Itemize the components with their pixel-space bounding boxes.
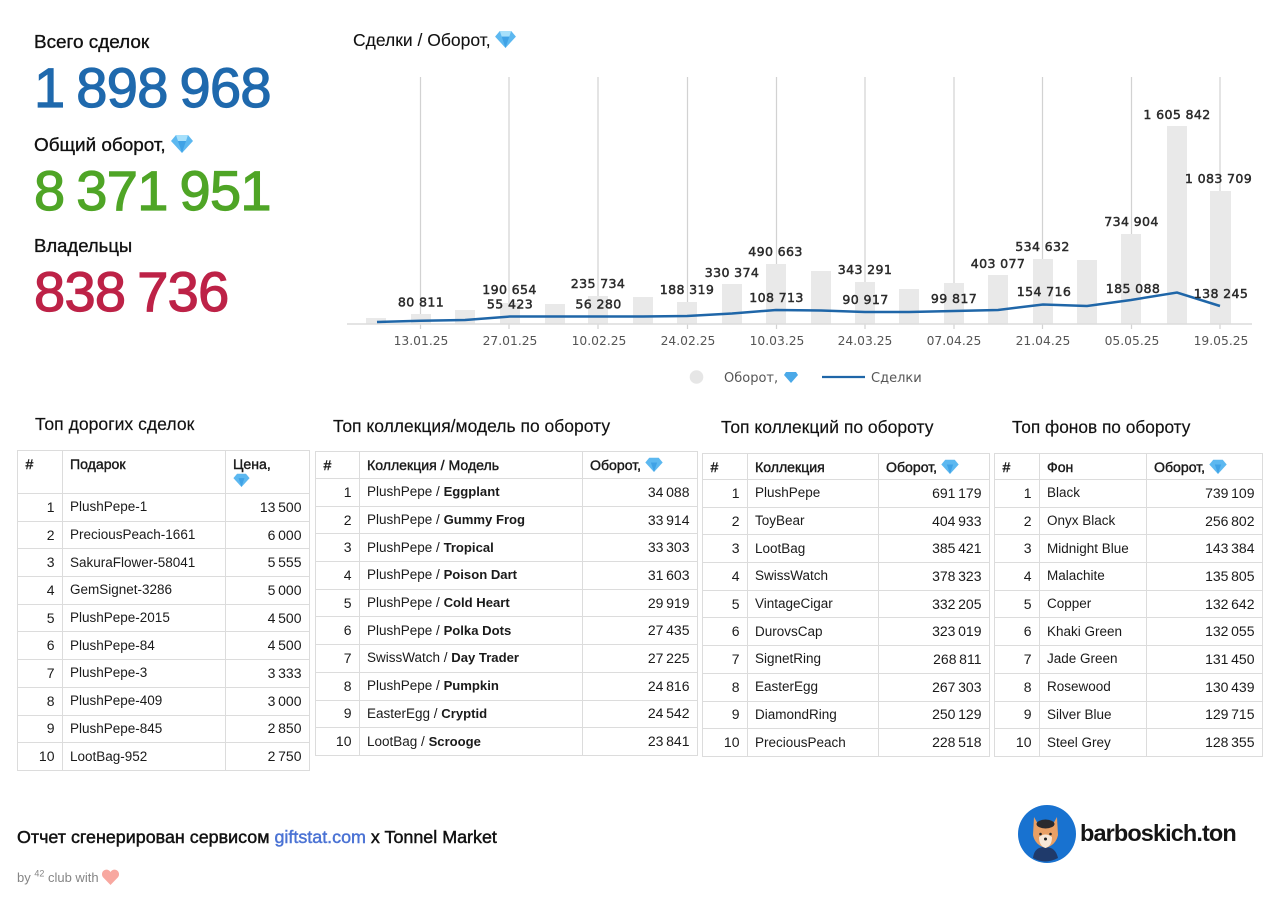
table: top collections: 5 [732, 596, 740, 612]
table: top collection/model: PlushPepe / Cold Heart [367, 595, 510, 610]
value: owners: 838 736 [34, 260, 229, 323]
x axis labels: 21.04.25 [1016, 334, 1070, 348]
table: top collections: 404 933 [932, 513, 982, 529]
data labels: 330 374 [705, 265, 759, 280]
table: top collections: 332 205 [932, 596, 982, 612]
table: top backgrounds: 8 [1024, 679, 1032, 695]
table: top expensive deals: LootBag-952 [70, 749, 147, 764]
table: top collections: VintageCigar [755, 596, 833, 611]
table: top expensive deals [17, 450, 310, 771]
table: top collection/model: 8 [344, 678, 352, 694]
heading: top collections: Топ коллекций по обороту [721, 417, 933, 437]
table: top collection/model: 9 [344, 705, 352, 721]
table: top collection/model: 2 [344, 512, 352, 528]
KPI: total deals [34, 32, 271, 119]
table: top collections: 267 303 [932, 679, 982, 695]
x axis labels: 13.01.25 [394, 334, 448, 348]
table: top backgrounds: 7 [1024, 651, 1032, 667]
data labels: 534 632 [1015, 239, 1070, 254]
table: top expensive deals: 3 [47, 554, 54, 570]
table: top expensive deals: PreciousPeach-1661 [70, 527, 195, 542]
table: top backgrounds: 131 450 [1205, 651, 1254, 667]
combo chart: turnover bars and deals line [347, 77, 1252, 386]
table: top collections: 250 129 [932, 706, 982, 722]
table: top collection/model: SwissWatch / Day Trader [367, 650, 519, 665]
table: top collection/model: # [324, 457, 331, 473]
footer: credit: by 42 club with [17, 869, 99, 885]
table: top expensive deals: 6 000 [268, 527, 302, 543]
table: top collections: 228 518 [932, 734, 982, 750]
table: top backgrounds: 2 [1024, 513, 1032, 529]
table: top collections: EasterEgg [755, 679, 818, 694]
data labels: 56 280 [575, 296, 622, 312]
table: top expensive deals: PlushPepe-409 [70, 693, 162, 708]
table: top collection/model: 4 [344, 567, 352, 583]
table: top backgrounds: Black [1047, 485, 1080, 500]
table: top collection/model: 33 914 [648, 512, 690, 528]
table: top backgrounds: 739 109 [1205, 485, 1254, 501]
x axis labels: 24.03.25 [838, 334, 892, 348]
table: top expensive deals: 1 [47, 499, 54, 515]
heading: top collection/model: Топ коллекция/модель по обороту [333, 416, 610, 436]
legend: Оборот, [724, 371, 778, 386]
table: top collections: 8 [732, 679, 740, 695]
data labels: 734 904 [1104, 214, 1159, 229]
table: top expensive deals: GemSignet-3286 [70, 582, 172, 597]
table: top expensive deals: PlushPepe-1 [70, 499, 147, 514]
table: top backgrounds: 6 [1024, 623, 1032, 639]
heading: top backgrounds: Топ фонов по обороту [1012, 417, 1190, 437]
x axis labels: 10.03.25 [750, 334, 804, 348]
table: top collection/model: 3 [344, 539, 352, 555]
legend: Сделки [871, 371, 922, 386]
table: top collections: Оборот, [886, 458, 937, 474]
data labels: 55 423 [487, 296, 533, 312]
table: top collections: 2 [732, 513, 740, 529]
table: top expensive deals: Цена, [233, 456, 271, 472]
table: top backgrounds: Фон [1047, 458, 1073, 474]
table: top expensive deals: PlushPepe-3 [70, 665, 147, 680]
table: top expensive deals: 2 [47, 527, 54, 543]
x axis labels: 07.04.25 [927, 334, 981, 348]
table: top expensive deals: 13 500 [260, 499, 302, 515]
legend [690, 370, 922, 386]
table: top backgrounds: 129 715 [1205, 706, 1254, 722]
table: top backgrounds: Оборот, [1154, 458, 1205, 474]
table: top expensive deals: SakuraFlower-58041 [70, 555, 195, 570]
table: top collection/model: 31 603 [648, 567, 690, 583]
table: top collections: 9 [732, 706, 740, 722]
x axis labels: 05.05.25 [1105, 334, 1159, 348]
table: top collections: 7 [732, 651, 740, 667]
table: top backgrounds: 128 355 [1205, 734, 1254, 750]
table: top collection/model: PlushPepe / Polka Dots [367, 623, 511, 638]
heading: top expensive deals: Топ дорогих сделок [35, 414, 194, 434]
table: top backgrounds: 9 [1024, 706, 1032, 722]
table: top expensive deals: 6 [47, 637, 54, 653]
table: top expensive deals: 5 000 [268, 582, 302, 598]
heading: total deals: Всего сделок [34, 32, 149, 53]
table: top collections: 691 179 [932, 485, 982, 501]
table: top backgrounds: 4 [1024, 568, 1032, 584]
table: top collection/model: PlushPepe / Poison Dart [367, 567, 517, 582]
data labels: 235 734 [571, 276, 625, 291]
table: top backgrounds: 130 439 [1205, 679, 1254, 695]
table: top collections: DurovsCap [755, 624, 823, 639]
table: top collection/model: EasterEgg / Cryptid [367, 706, 487, 721]
turnover bars [366, 126, 1231, 324]
table: top backgrounds: 10 [1016, 734, 1032, 750]
table: top collection/model: Коллекция / Модель [367, 457, 499, 473]
table: top collections: LootBag [755, 541, 805, 556]
data labels: 90 917 [842, 292, 889, 307]
table: top expensive deals: 10 [39, 748, 54, 764]
data labels: 138 245 [1194, 286, 1248, 301]
table: top collection/model [315, 451, 698, 756]
table: top expensive deals: 4 [47, 582, 54, 598]
value: total deals: 1 898 968 [34, 56, 271, 119]
table: top collection/model: 34 088 [648, 484, 690, 500]
table: top collection/model: 23 841 [648, 733, 690, 749]
table: top collections [702, 453, 990, 757]
table: top backgrounds: 1 [1024, 485, 1032, 501]
table: top backgrounds: # [1002, 458, 1010, 474]
table: top collections: 268 811 [933, 651, 982, 667]
data labels: 188 319 [660, 282, 714, 297]
table: top expensive deals: 3 000 [268, 693, 302, 709]
table: top collections: 323 019 [932, 623, 982, 639]
table: top collections: Коллекция [755, 458, 825, 474]
table: top expensive deals: 4 500 [268, 610, 302, 626]
table: top expensive deals: 7 [47, 665, 54, 681]
table: top collection/model: 10 [336, 733, 352, 749]
table: top expensive deals: 8 [47, 693, 54, 709]
table: top expensive deals: 9 [47, 720, 54, 736]
table: top collections: DiamondRing [755, 707, 837, 722]
table: top backgrounds: 256 802 [1205, 513, 1254, 529]
table: top expensive deals: PlushPepe-84 [70, 638, 155, 653]
table: top expensive deals: # [26, 456, 33, 472]
table: top backgrounds: Khaki Green [1047, 624, 1122, 639]
data labels: 154 716 [1017, 284, 1071, 299]
table: top collection/model: 7 [344, 650, 352, 666]
deals line [377, 292, 1220, 322]
data labels [398, 107, 1252, 312]
data labels: 80 811 [398, 294, 444, 310]
table: top backgrounds: Malachite [1047, 568, 1105, 583]
table: top collection/model: LootBag / Scrooge [367, 734, 481, 749]
table: top collections: SwissWatch [755, 568, 828, 583]
table: top collections: PreciousPeach [755, 735, 846, 750]
table: top collection/model: 24 816 [648, 678, 690, 694]
table: top expensive deals: Подарок [70, 456, 126, 472]
table: top expensive deals: 5 555 [268, 554, 302, 570]
table: top backgrounds: 132 642 [1205, 596, 1254, 612]
table: top collections: PlushPepe [755, 485, 820, 500]
table: top backgrounds: Steel Grey [1047, 735, 1111, 750]
table: top collections: # [710, 458, 718, 474]
x axis labels: 27.01.25 [483, 334, 537, 348]
data labels: 1 083 709 [1185, 171, 1252, 186]
table: top expensive deals: PlushPepe-845 [70, 721, 162, 736]
table: top collection/model: 27 225 [648, 650, 690, 666]
table: top collection/model: 1 [344, 484, 352, 500]
table: top backgrounds: 135 805 [1205, 568, 1254, 584]
table: top collections: 6 [732, 623, 740, 639]
data labels: 490 663 [748, 244, 803, 259]
table: top collection/model: PlushPepe / Eggplant [367, 484, 500, 499]
x axis labels: 24.02.25 [661, 334, 715, 348]
data labels: 99 817 [931, 291, 977, 306]
table: top expensive deals: PlushPepe-2015 [70, 610, 170, 625]
table: top backgrounds: Silver Blue [1047, 707, 1112, 722]
data labels: 343 291 [838, 262, 892, 277]
table: top collection/model: 29 919 [648, 595, 690, 611]
table: top collections: SignetRing [755, 651, 821, 666]
table: top expensive deals: 2 850 [268, 720, 302, 736]
table: top backgrounds: 143 384 [1205, 540, 1254, 556]
table: top collection/model: 27 435 [648, 622, 690, 638]
table: top expensive deals: 3 333 [268, 665, 302, 681]
table: top collections: 378 323 [932, 568, 982, 584]
table: top collection/model: PlushPepe / Pumpkin [367, 678, 499, 693]
table: top backgrounds: Midnight Blue [1047, 541, 1129, 556]
table: top collections: 3 [732, 540, 740, 556]
table: top backgrounds: 132 055 [1205, 623, 1254, 639]
table: top backgrounds: 5 [1024, 596, 1032, 612]
table: top expensive deals: 4 500 [268, 637, 302, 653]
table: top collection/model: 24 542 [648, 705, 690, 721]
table: top collection/model: 5 [344, 595, 352, 611]
table: top backgrounds: 3 [1024, 540, 1032, 556]
data labels: 185 088 [1106, 281, 1160, 296]
table: top collections: 385 421 [932, 540, 982, 556]
x axis labels: 19.05.25 [1194, 334, 1248, 348]
table: top expensive deals: 5 [47, 610, 54, 626]
icon: avatar [1018, 805, 1076, 863]
table: top collection/model: PlushPepe / Gummy Frog [367, 512, 525, 527]
table: top collections: 4 [732, 568, 740, 584]
table: top backgrounds: Onyx Black [1047, 513, 1115, 528]
table: top collection/model: 33 303 [648, 539, 690, 555]
KPI: owners [34, 235, 229, 323]
x axis labels: 10.02.25 [572, 334, 626, 348]
data labels: 190 654 [482, 282, 537, 297]
table: top backgrounds: Copper [1047, 596, 1091, 611]
data labels: 108 713 [749, 290, 804, 305]
table: top collection/model: 6 [344, 622, 352, 638]
heading: owners: Владельцы [34, 235, 132, 256]
table: top expensive deals: 2 750 [268, 748, 302, 764]
value: total turnover: 8 371 951 [34, 159, 271, 222]
table: top collections: 1 [732, 485, 740, 501]
heading: total turnover: Общий оборот, [34, 135, 166, 156]
table: top collections: ToyBear [755, 513, 805, 528]
brand name: barboskich.ton [1080, 820, 1236, 846]
footer: generated by: Отчет сгенерирован сервисом giftstat.com x Tonnel Market [17, 827, 497, 847]
table: top backgrounds: Rosewood [1047, 679, 1111, 694]
table: top collection/model: PlushPepe / Tropical [367, 540, 494, 555]
table: top collection/model: Оборот, [590, 457, 641, 473]
x axis labels [394, 334, 1248, 348]
data labels: 403 077 [971, 256, 1025, 271]
chart heading: Сделки / Оборот, [353, 30, 491, 50]
table: top backgrounds: Jade Green [1047, 651, 1118, 666]
data labels: 1 605 842 [1143, 107, 1211, 122]
table: top collections: 10 [724, 734, 740, 750]
KPI: total turnover [34, 135, 271, 222]
table: top backgrounds [994, 453, 1263, 757]
